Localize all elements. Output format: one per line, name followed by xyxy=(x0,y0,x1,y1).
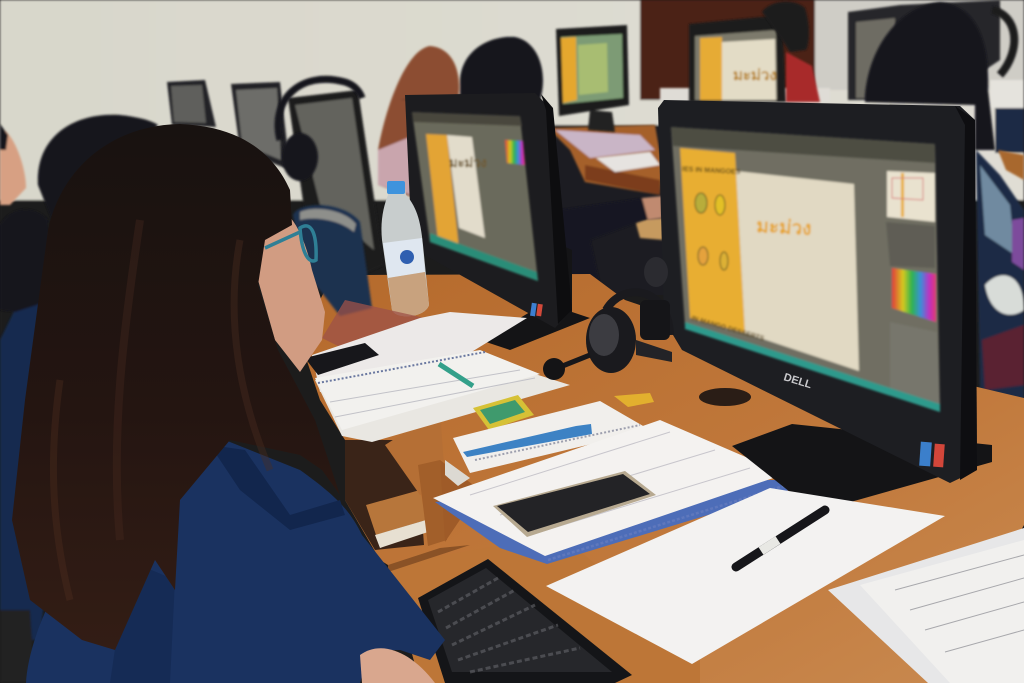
background monitors xyxy=(167,0,1000,275)
monitor: far right xyxy=(689,15,786,102)
taskbar xyxy=(685,322,940,412)
far desks xyxy=(548,88,1024,240)
blue bag on desk xyxy=(293,205,372,316)
open notebook xyxy=(315,350,570,442)
right panel xyxy=(886,222,935,268)
student: foreground woman xyxy=(12,124,445,683)
monitor: far right: มะม่วง xyxy=(733,67,777,84)
artboard sidebar yellow xyxy=(680,148,745,333)
mango icons xyxy=(695,193,728,270)
smartphone xyxy=(493,471,656,537)
monitor screen: IN MANGO DESSERTS xyxy=(690,315,765,343)
eraser pack xyxy=(473,395,534,430)
long hair xyxy=(12,124,340,650)
monitor: corner right xyxy=(848,0,1000,100)
loose white paper xyxy=(546,488,945,664)
desk: main long wooden table xyxy=(300,274,1024,683)
artboard paper xyxy=(736,171,859,371)
student: near right black hair floral shirt xyxy=(865,2,1024,400)
monitor body xyxy=(658,100,977,483)
glasses xyxy=(265,226,316,261)
monitor screen xyxy=(671,127,940,412)
student: red shirt far right xyxy=(762,2,820,102)
background students xyxy=(0,2,1024,400)
face xyxy=(258,204,325,372)
student: far left face edge xyxy=(0,124,26,205)
navigator panel xyxy=(887,171,935,222)
water bottle xyxy=(381,181,429,316)
student: black hair xyxy=(400,37,662,285)
marker pen xyxy=(736,510,825,567)
color spectrum xyxy=(892,268,936,322)
student: second person behind, left xyxy=(0,115,158,683)
desk: gap and front edge xyxy=(345,410,700,683)
notebook with blue pen xyxy=(445,401,650,486)
hand xyxy=(360,648,435,683)
brand logo: DELL xyxy=(782,371,813,391)
plastic folder with papers xyxy=(828,528,1024,683)
phone small xyxy=(305,343,379,375)
headset on desk xyxy=(543,257,672,380)
monitor: middle Dell all-in-one xyxy=(405,93,590,350)
monitors: far left row xyxy=(167,80,384,275)
pink reflection and paper on desk xyxy=(312,300,527,392)
monitor: far centre xyxy=(556,25,629,132)
spiral notebook with handwritten page xyxy=(433,420,790,564)
monitor: foreground Dell all-in-one xyxy=(658,100,992,505)
jacket xyxy=(26,440,445,683)
candy xyxy=(614,393,654,407)
student: red hair pink top xyxy=(378,46,459,200)
monitor foot shadow xyxy=(699,388,751,406)
sidebar heading: IES IN MANGOES xyxy=(682,166,741,176)
monitor stand xyxy=(732,424,992,505)
badges xyxy=(919,442,932,466)
keyboard xyxy=(418,559,632,683)
headphones on background monitor xyxy=(278,79,362,181)
monitor: middle Dell all-in-one: มะม่วง xyxy=(449,155,487,170)
headset: right student xyxy=(992,10,1014,75)
thai logo word: มะม่วง xyxy=(756,216,812,240)
